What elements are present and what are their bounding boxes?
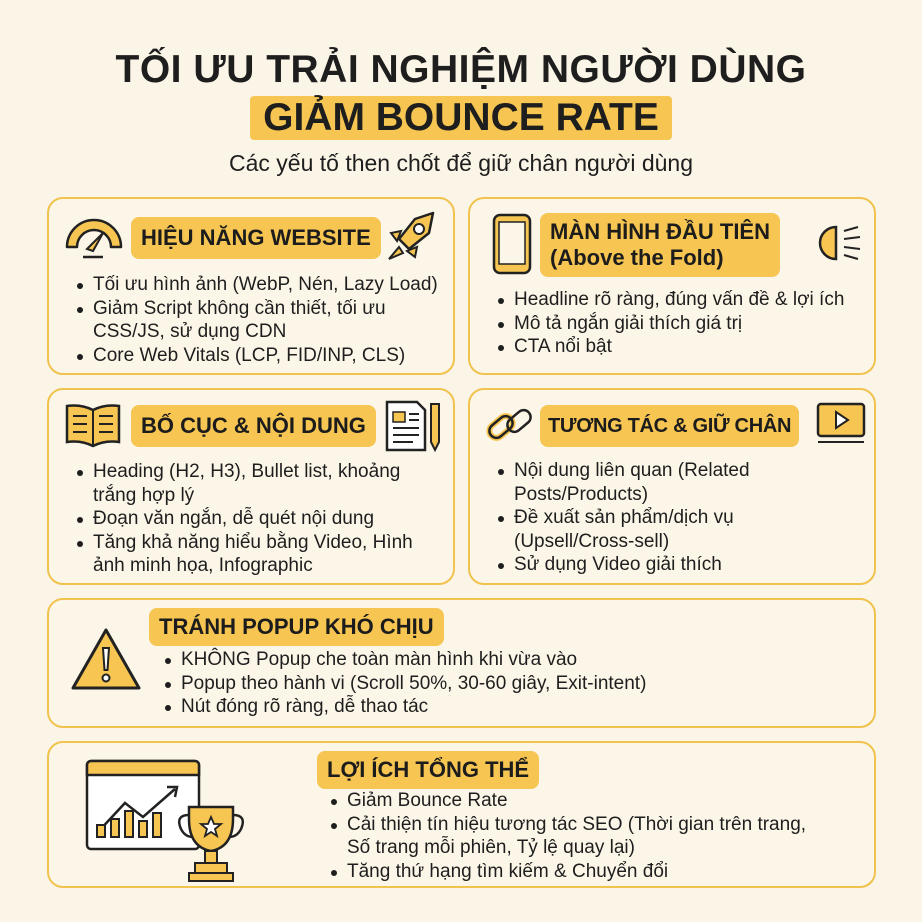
heading: [131, 217, 381, 259]
heading: [149, 608, 444, 646]
bullets: Mô tả ngắn giải thích giá trị: [514, 312, 742, 334]
heading: [131, 405, 376, 447]
heading: [317, 751, 539, 789]
panel: lợi ích tổng thể: [47, 741, 876, 888]
bullets: KHÔNG Popup che toàn màn hình khi vừa vào: [181, 649, 577, 670]
bullets: Tối ưu hình ảnh (WebP, Nén, Lazy Load): [93, 274, 438, 295]
bullets: Nút đóng rõ ràng, dễ thao tác: [181, 696, 428, 717]
heading: TƯƠNG TÁC & GIỮ CHÂN: [548, 415, 791, 437]
subtitle: Các yếu tố then chốt để giữ chân người dùng: [229, 150, 693, 176]
bullets: [77, 461, 413, 576]
panel: hiệu năng website: [47, 197, 455, 375]
icon: headlight: [818, 226, 860, 260]
title: TỐI ƯU TRẢI NGHIỆM NGƯỜI DÙNG: [116, 48, 806, 91]
icon: rocket: [388, 212, 434, 260]
panel: tránh popup: [47, 598, 876, 728]
heading: TRÁNH POPUP KHÓ CHỊU: [159, 614, 434, 639]
heading: MÀN HÌNH ĐẦU TIÊN: [550, 219, 770, 244]
bullets: Popup theo hành vi (Scroll 50%, 30-60 giây, Exit-intent): [181, 672, 646, 694]
heading: [540, 213, 780, 277]
panel: tương tác & giữ chân: [468, 388, 876, 585]
bullets: Core Web Vitals (LCP, FID/INP, CLS): [93, 344, 405, 366]
bullets: [77, 274, 438, 366]
title highlight line: GIẢM BOUNCE RATE: [263, 96, 659, 139]
bullets: CTA nổi bật: [514, 336, 612, 357]
bullets: Tăng thứ hạng tìm kiếm & Chuyển đổi: [347, 860, 668, 882]
panel: bố cục & nội dung: [47, 388, 455, 585]
heading: [540, 405, 799, 447]
icon: warning: [72, 628, 141, 690]
icon: speedometer: [66, 218, 122, 258]
bullets: Giảm Bounce Rate: [347, 790, 508, 811]
bullets: Giảm Script không cần thiết, tối ưu CSS/JS, sử dụng CDN: [93, 298, 386, 342]
bullets: [165, 648, 646, 717]
icon: book: [66, 404, 120, 448]
icon: video: [816, 402, 866, 443]
icon: chart and trophy: [86, 760, 244, 882]
heading: LỢI ÍCH TỔNG THỂ: [327, 757, 529, 782]
heading: BỐ CỤC & NỘI DUNG: [141, 413, 366, 438]
icon: link: [486, 408, 532, 441]
bullets: Heading (H2, H3), Bullet list, khoảng trắng hợp lý: [93, 461, 400, 506]
bullets: Nội dung liên quan (Related Posts/Products): [514, 460, 750, 504]
icon: document and pencil: [386, 400, 440, 452]
bullets: [498, 289, 844, 357]
bullets: Cải thiện tín hiệu tương tác SEO (Thời gian trên trang, Số trang mỗi phiên, Tỷ lệ quay lại): [347, 814, 806, 858]
bullets: Sử dụng Video giải thích: [514, 554, 722, 575]
bullets: [498, 460, 750, 575]
panel: màn hình đầu tiên: [468, 197, 876, 375]
bullets: Đề xuất sản phẩm/dịch vụ (Upsell/Cross-sell): [514, 507, 734, 552]
bullets: [331, 790, 806, 882]
bullets: Headline rõ ràng, đúng vấn đề & lợi ích: [514, 289, 844, 310]
icon: phone: [492, 214, 532, 274]
bullets: Tăng khả năng hiểu bằng Video, Hình ảnh minh họa, Infographic: [93, 532, 413, 576]
heading: HIỆU NĂNG WEBSITE: [141, 225, 371, 250]
heading: (Above the Fold): [550, 245, 724, 270]
bullets: Đoạn văn ngắn, dễ quét nội dung: [93, 508, 374, 529]
